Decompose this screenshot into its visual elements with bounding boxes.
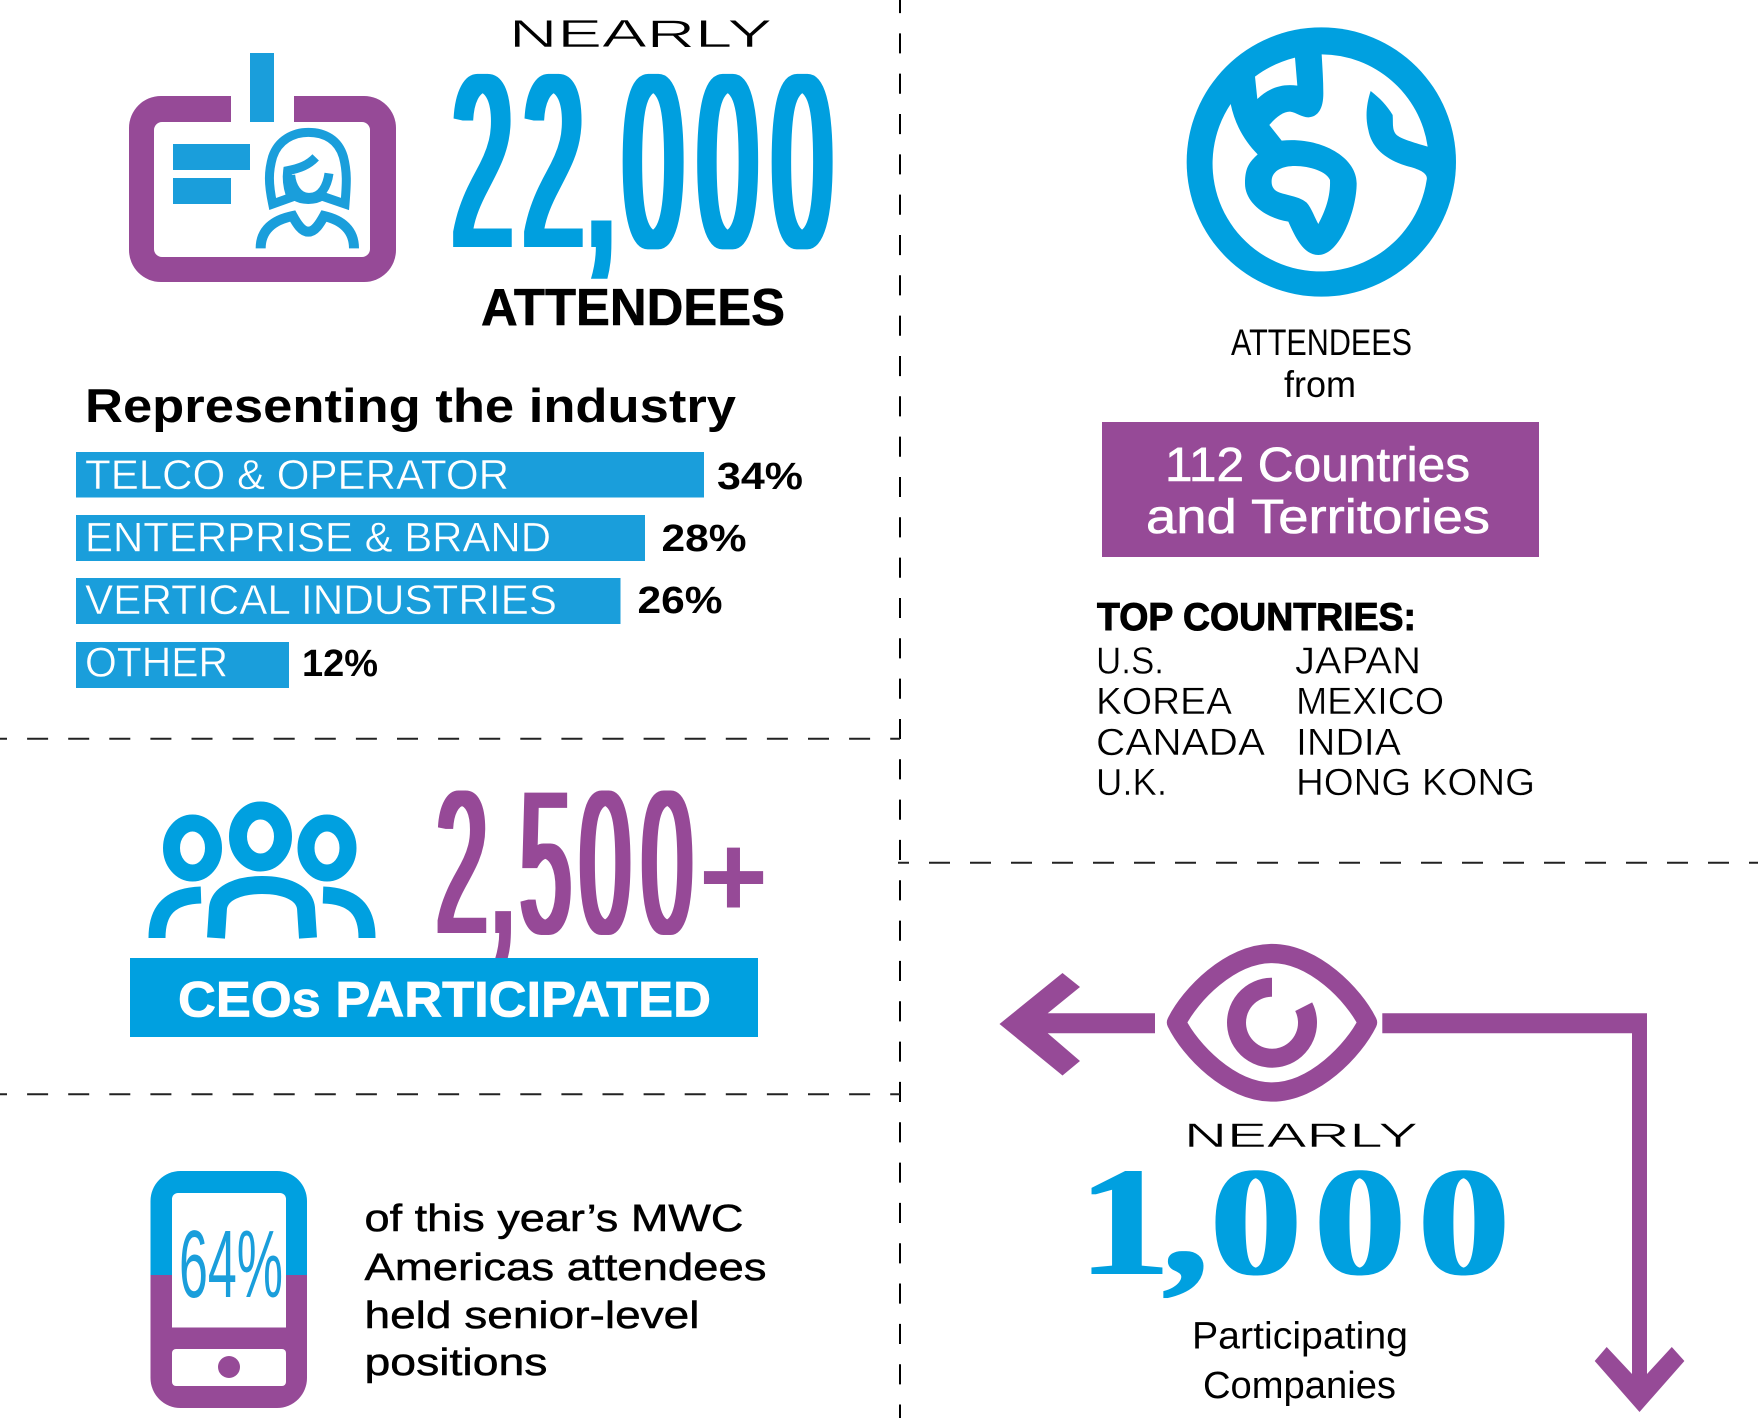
list: top countries: MEXICO [1296, 681, 1444, 723]
banner: CEOs participated: CEOs PARTICIPATED [178, 972, 711, 1028]
callout: 112 countries and territories [1102, 422, 1539, 557]
heading: Representing the industry: Representing the industry [85, 379, 736, 432]
text: senior-level positions [364, 1198, 766, 1384]
arrow: pointing left [1000, 973, 1155, 1076]
icon: globe [1187, 27, 1456, 297]
bar: telco and operator 34%: 34% [717, 456, 803, 498]
callout: 112 countries and territories: 112 Countries [1165, 439, 1470, 492]
stat: nearly 1,000 participating companies: 1,000 [1079, 1135, 1509, 1308]
stat: 2,500+: 2,500 [436, 750, 693, 977]
stat: 2,500+: + [699, 811, 768, 943]
list: top countries: CANADA [1096, 722, 1266, 764]
arrow: right then down [1382, 1013, 1684, 1412]
callout: 112 countries and territories: and Territories [1146, 491, 1490, 544]
heading: nearly 22,000 attendees: ATTENDEES [481, 279, 785, 337]
icon: smartphone with 64% [150, 1171, 307, 1408]
list: top countries: U.S. [1096, 640, 1164, 682]
text: attendees from: ATTENDEES [1231, 322, 1412, 363]
banner: CEOs participated [130, 958, 758, 1037]
icon: three people [157, 810, 367, 938]
bar: enterprise and brand 28%: ENTERPRISE & BRAND [85, 514, 551, 560]
bar: vertical industries 26%: 26% [638, 580, 722, 622]
heading: nearly 22,000 attendees: NEARLY [509, 13, 772, 56]
icon: smartphone with 64%: 64% [179, 1211, 283, 1318]
bar: telco and operator 34%: TELCO & OPERATOR [85, 451, 509, 498]
list: top countries: KOREA [1096, 681, 1233, 723]
list: top countries: U.K. [1096, 762, 1167, 804]
stat: nearly 1,000 participating companies [1079, 1117, 1509, 1407]
bar: enterprise and brand 28%: 28% [662, 518, 746, 560]
list: top countries: TOP COUNTRIES: [1097, 596, 1416, 639]
text: attendees from [1231, 322, 1412, 405]
stat: nearly 1,000 participating companies: Participating [1192, 1316, 1408, 1358]
icon: ID badge [129, 53, 396, 282]
text: senior-level positions: of this year’s MWC [364, 1198, 744, 1240]
list: top countries: JAPAN [1295, 640, 1421, 682]
bar: other 12% [76, 638, 378, 688]
stat: nearly 1,000 participating companies: NEARLY [1184, 1117, 1418, 1155]
bar: other 12%: OTHER [85, 638, 228, 686]
bar: telco and operator 34% [76, 451, 803, 498]
list: top countries: INDIA [1296, 722, 1402, 764]
stat: nearly 1,000 participating companies: Companies [1203, 1365, 1396, 1407]
bar chart: industry representation [76, 451, 803, 688]
text: senior-level positions: positions [364, 1342, 548, 1384]
heading: nearly 22,000 attendees: 22,000 [453, 24, 832, 300]
list: top countries: HONG KONG [1296, 762, 1535, 804]
text: senior-level positions: Americas attendees [364, 1247, 766, 1289]
bar: other 12%: 12% [302, 643, 378, 685]
icon: eye [1176, 954, 1368, 1092]
text: senior-level positions: held senior-level [364, 1295, 700, 1337]
text: attendees from: from [1284, 364, 1356, 405]
bar: vertical industries 26%: VERTICAL INDUSTRIES [85, 576, 557, 623]
list: top countries [1096, 596, 1535, 804]
bar: enterprise and brand 28% [76, 514, 746, 561]
